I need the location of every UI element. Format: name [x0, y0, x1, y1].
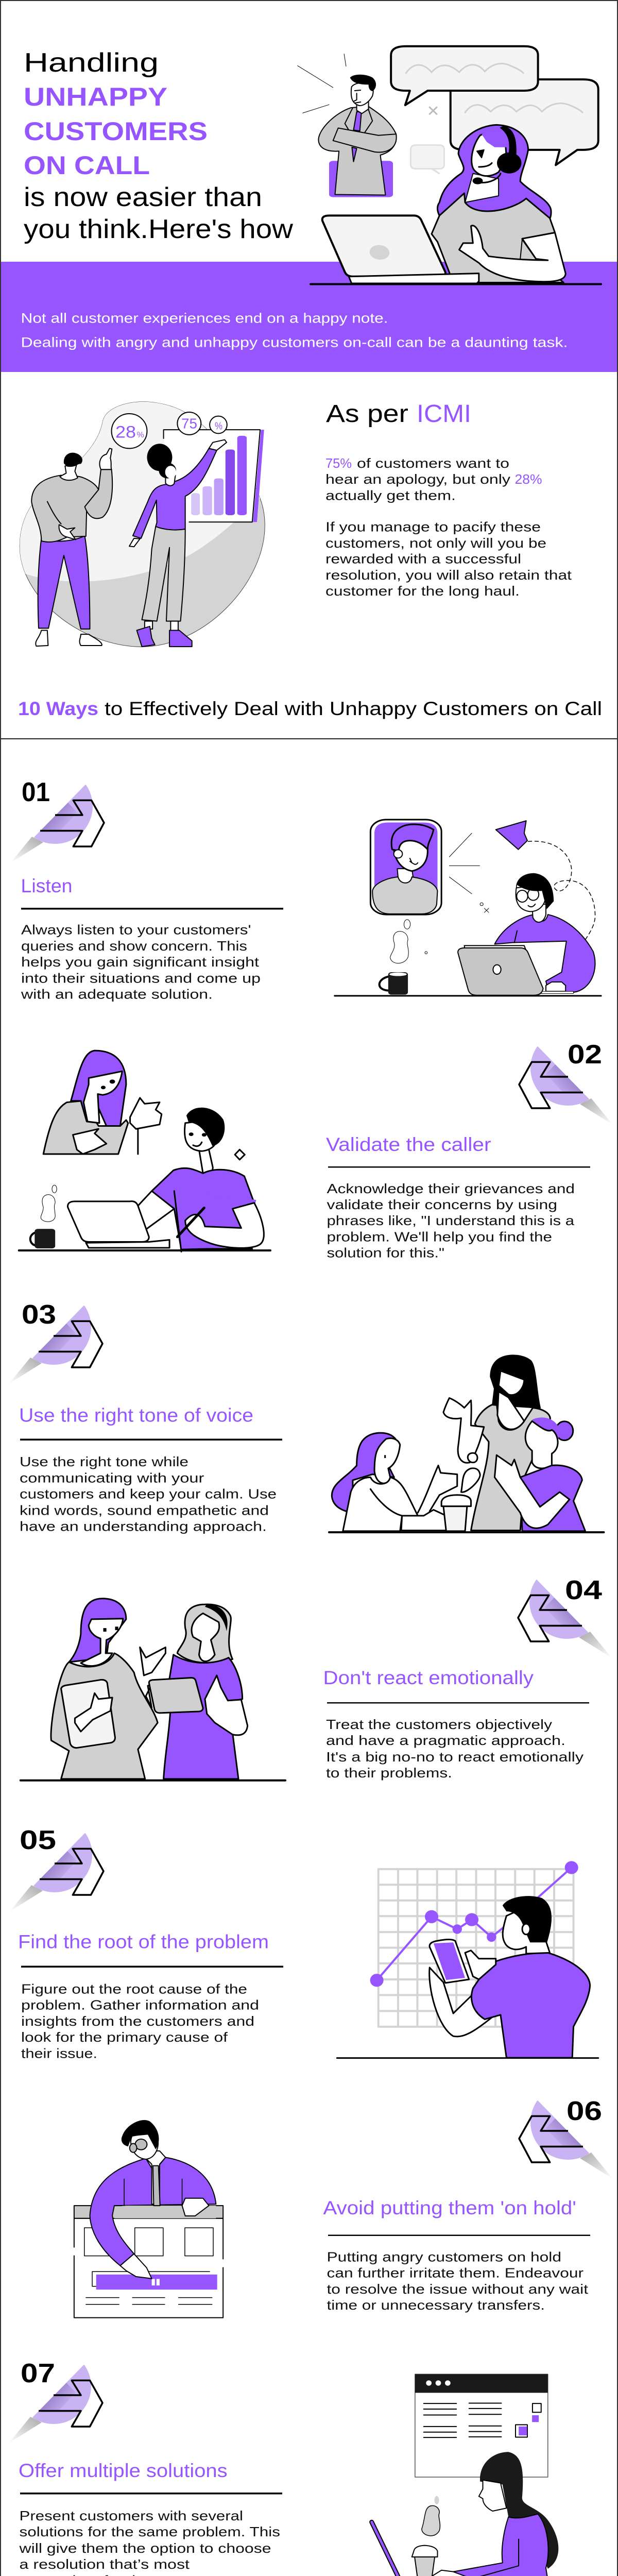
dashed flight path — [528, 841, 595, 940]
intro text — [21, 310, 568, 350]
step 06: 06 — [566, 2096, 602, 2126]
icmi text: customer for the long haul. — [325, 583, 520, 599]
arrow icon — [10, 769, 104, 863]
illustration 07 — [372, 2374, 558, 2576]
step 05: Figure out the root cause of the — [21, 1981, 247, 1997]
illustration 06 — [74, 2120, 223, 2318]
title: you think.Here's how — [24, 214, 293, 244]
angry man — [318, 75, 397, 197]
coffee cup — [441, 1495, 471, 1531]
man with phone — [337, 1896, 598, 2058]
illustration 05 — [337, 1861, 598, 2058]
signal rays — [449, 833, 479, 894]
icmi text: of customers want to — [357, 455, 509, 471]
woman with bun — [329, 1417, 604, 1532]
step 06: time or unnecessary transfers. — [327, 2297, 545, 2313]
step 07: a resolution that’s most — [20, 2556, 190, 2572]
man pointing — [31, 448, 112, 646]
step 01: queries and show concern. This — [21, 938, 247, 954]
step 01: into their situations and come up — [21, 971, 261, 986]
step 07: solutions for the same problem. This — [20, 2524, 280, 2539]
step 03: Use the right tone while — [20, 1454, 188, 1469]
step 01 — [10, 769, 283, 1002]
arrow icon — [9, 2349, 102, 2443]
step 01: 01 — [22, 777, 50, 807]
illustration 02 — [19, 1050, 270, 1251]
step 03: customers and keep your calm. Use — [20, 1486, 277, 1502]
step 07: will give them the option to choose — [19, 2540, 271, 2556]
browser window — [74, 2206, 223, 2318]
seated woman — [332, 1433, 457, 1531]
step 02: Acknowledge their grievances and — [327, 1181, 575, 1196]
icmi text — [325, 455, 572, 599]
step 05: 05 — [20, 1825, 56, 1855]
stat bubbles — [112, 412, 227, 448]
illustration 01 — [335, 820, 601, 996]
step 05: their issue. — [21, 2046, 97, 2061]
step 06: Avoid putting them 'on hold' — [323, 2197, 576, 2218]
step 05 — [10, 1817, 283, 2061]
step 04: Don't react emotionally — [323, 1667, 534, 1688]
step 06: Putting angry customers on hold — [327, 2249, 561, 2265]
step 06: to resolve the issue without any wait — [327, 2281, 589, 2297]
step 01: Always listen to your customers' — [21, 922, 251, 938]
hero illustration — [298, 46, 601, 284]
step 03: kind words, sound empathetic and — [20, 1502, 269, 1518]
step 02: 02 — [568, 1040, 602, 1070]
intro band — [0, 262, 618, 372]
coffee mug and steam — [380, 920, 410, 995]
stat numbers: 75 — [181, 416, 197, 432]
as per icmi heading: ICMI — [417, 400, 471, 428]
step 02: solution for this." — [327, 1245, 444, 1260]
step 05: problem. Gather information and — [21, 1997, 259, 2012]
step 04: 04 — [565, 1575, 602, 1605]
background blob — [0, 399, 268, 647]
paper plane — [496, 821, 527, 850]
title: ON CALL — [24, 151, 150, 180]
woman with tablet — [51, 1599, 158, 1779]
step 01: Listen — [21, 875, 72, 896]
step 03: communicating with your — [20, 1470, 204, 1486]
step 01: helps you gain significant insight — [21, 954, 260, 970]
agent woman — [311, 125, 601, 284]
as per icmi heading: As per — [326, 400, 408, 428]
step 03: Use the right tone of voice — [19, 1404, 253, 1426]
step 01: with an adequate solution. — [21, 987, 213, 1002]
step 04 — [323, 1564, 612, 1781]
standing woman — [443, 1355, 550, 1531]
step 06 — [323, 2084, 613, 2313]
step 02: phrases like, "I understand this is a — [327, 1213, 575, 1228]
section heading: to Effectively Deal with Unhappy Customers on Call — [105, 698, 602, 719]
icmi text: 28% — [515, 471, 542, 487]
speech bubble back — [451, 79, 598, 165]
title: CUSTOMERS — [24, 117, 208, 146]
arrow icon — [518, 1564, 612, 1658]
step 05: insights from the customers and — [21, 2013, 254, 2029]
stat numbers — [115, 416, 222, 441]
woman on laptop — [372, 2452, 558, 2576]
as per icmi heading — [326, 400, 471, 428]
statistics illustration — [0, 399, 268, 647]
step 04: It's a big no-no to react emotionally — [326, 1749, 583, 1765]
speech bubble front — [391, 46, 538, 105]
icmi text: resolution, you will also retain that — [325, 567, 572, 583]
arrow icon — [9, 1290, 102, 1384]
title — [24, 48, 293, 244]
step 07: Offer multiple solutions — [19, 2460, 228, 2481]
trend line — [370, 1861, 578, 1987]
options window — [415, 2374, 548, 2477]
man with laptop — [19, 1108, 270, 1251]
step 04: to their problems. — [326, 1765, 452, 1781]
step 02: Validate the caller — [326, 1134, 491, 1155]
step 05: Find the root of the problem — [18, 1931, 269, 1953]
illustration 04 — [21, 1599, 285, 1781]
stat numbers: % — [137, 431, 144, 439]
illustration 03 — [329, 1355, 604, 1532]
step 07: Present customers with several — [20, 2508, 243, 2523]
agent with laptop — [335, 873, 601, 996]
step 05: look for the primary cause of — [21, 2029, 228, 2045]
customer portrait — [370, 820, 441, 914]
step 06: can further irritate them. Endeavour — [327, 2265, 583, 2280]
step 03: 03 — [22, 1300, 56, 1330]
woman talking — [43, 1050, 162, 1154]
step 02: problem. We'll help you find the — [327, 1229, 552, 1244]
arrow icon — [519, 1030, 613, 1125]
stat numbers: 28 — [115, 422, 136, 441]
icmi text: 75% — [325, 455, 352, 471]
step 04: Treat the customers objectively — [326, 1717, 552, 1732]
grid — [379, 1869, 574, 2027]
step 02: validate their concerns by using — [327, 1197, 557, 1212]
step 04: and have a pragmatic approach. — [326, 1733, 565, 1748]
section heading: 10 Ways — [18, 698, 98, 719]
woman presenting — [129, 440, 227, 647]
icmi text: customers, not only will you be — [325, 535, 546, 551]
title: is now easier than — [24, 182, 262, 212]
man at the window — [90, 2120, 216, 2279]
small marks — [425, 903, 489, 954]
title: Handling — [24, 48, 159, 78]
step 03 — [9, 1290, 282, 1534]
step 03: have an understanding approach. — [20, 1518, 267, 1534]
icmi text: If you manage to pacify these — [325, 519, 541, 535]
arrow icon — [519, 2084, 613, 2179]
icmi text: actually get them. — [325, 487, 456, 503]
step 07 — [9, 2349, 282, 2576]
anger rays — [298, 54, 346, 113]
intro text: Dealing with angry and unhappy customers on-call can be a daunting task. — [21, 335, 568, 350]
small bubble and x mark — [410, 107, 444, 174]
icmi text: rewarded with a successful — [325, 551, 521, 566]
step 07: 07 — [21, 2359, 55, 2388]
stat numbers: % — [215, 421, 222, 432]
woman in dress — [21, 1604, 285, 1781]
chart board — [164, 430, 264, 522]
arrow icon — [10, 1817, 104, 1911]
intro text: Not all customer experiences end on a happy note. — [21, 310, 388, 326]
icmi text: hear an apology, but only — [325, 471, 510, 487]
title: UNHAPPY — [24, 82, 167, 111]
step 02 — [326, 1030, 613, 1260]
